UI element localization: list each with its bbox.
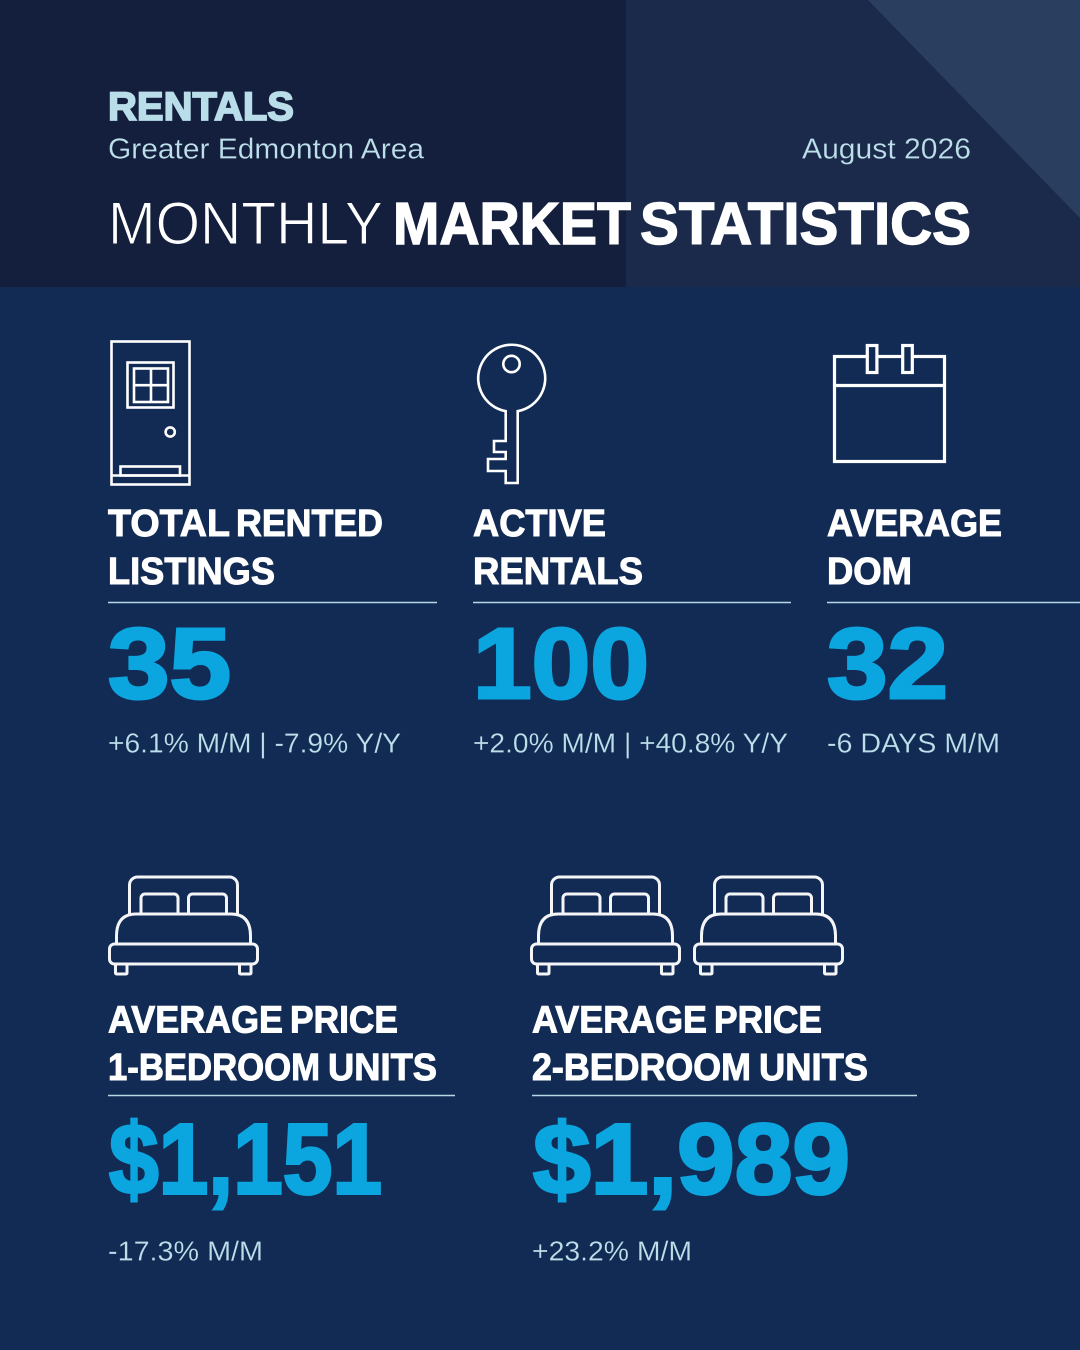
number: 100 <box>473 608 649 720</box>
change: -6 DAYS M/M <box>827 728 1000 758</box>
heading: RENTALS <box>473 551 643 593</box>
heading: UNITS <box>759 1047 868 1089</box>
change: +2.0% M/M | +40.8% Y/Y <box>473 728 788 758</box>
icon: calendar <box>834 346 944 462</box>
title <box>108 190 971 257</box>
panel: average dom <box>827 346 1080 758</box>
heading: LISTINGS <box>108 551 275 593</box>
panel: total rented listings <box>108 342 437 758</box>
panel: 2-bedroom price <box>532 877 917 1266</box>
heading: RENTED <box>236 503 383 545</box>
heading: UNITS <box>328 1047 437 1089</box>
date: August 2026 <box>802 134 971 166</box>
panel: 1-bedroom price <box>108 877 455 1266</box>
heading <box>108 503 383 593</box>
title: MONTHLY <box>108 190 383 257</box>
heading: TOTAL <box>108 503 230 545</box>
icon: key <box>478 345 545 483</box>
number: $1,151 <box>109 1104 382 1216</box>
number: 32 <box>827 608 948 720</box>
heading: rentals: RENTALS <box>108 85 294 129</box>
heading: PRICE <box>290 1000 398 1042</box>
icon: door <box>112 342 190 484</box>
panel: active rentals <box>473 345 791 758</box>
heading: DOM <box>827 551 912 593</box>
title: STATISTICS <box>640 190 971 257</box>
heading: ACTIVE <box>473 503 606 545</box>
icon: bed <box>110 877 258 974</box>
title: MARKET <box>393 190 631 257</box>
icon: two beds <box>532 877 842 974</box>
heading: AVERAGE <box>532 1000 707 1042</box>
header band <box>0 0 1080 287</box>
heading <box>827 503 1002 593</box>
change: +23.2% M/M <box>532 1236 692 1266</box>
heading <box>108 1000 437 1089</box>
heading: AVERAGE <box>108 1000 283 1042</box>
heading: 1-BEDROOM <box>108 1047 320 1089</box>
change: +6.1% M/M | -7.9% Y/Y <box>108 728 401 758</box>
heading: AVERAGE <box>827 503 1002 545</box>
heading: 2-BEDROOM <box>532 1047 751 1089</box>
heading: PRICE <box>714 1000 822 1042</box>
change: -17.3% M/M <box>108 1236 263 1266</box>
heading <box>473 503 643 593</box>
number: 35 <box>108 608 231 720</box>
subheading: area: Greater Edmonton Area <box>108 134 424 166</box>
number: $1,989 <box>533 1104 850 1216</box>
heading <box>532 1000 868 1089</box>
